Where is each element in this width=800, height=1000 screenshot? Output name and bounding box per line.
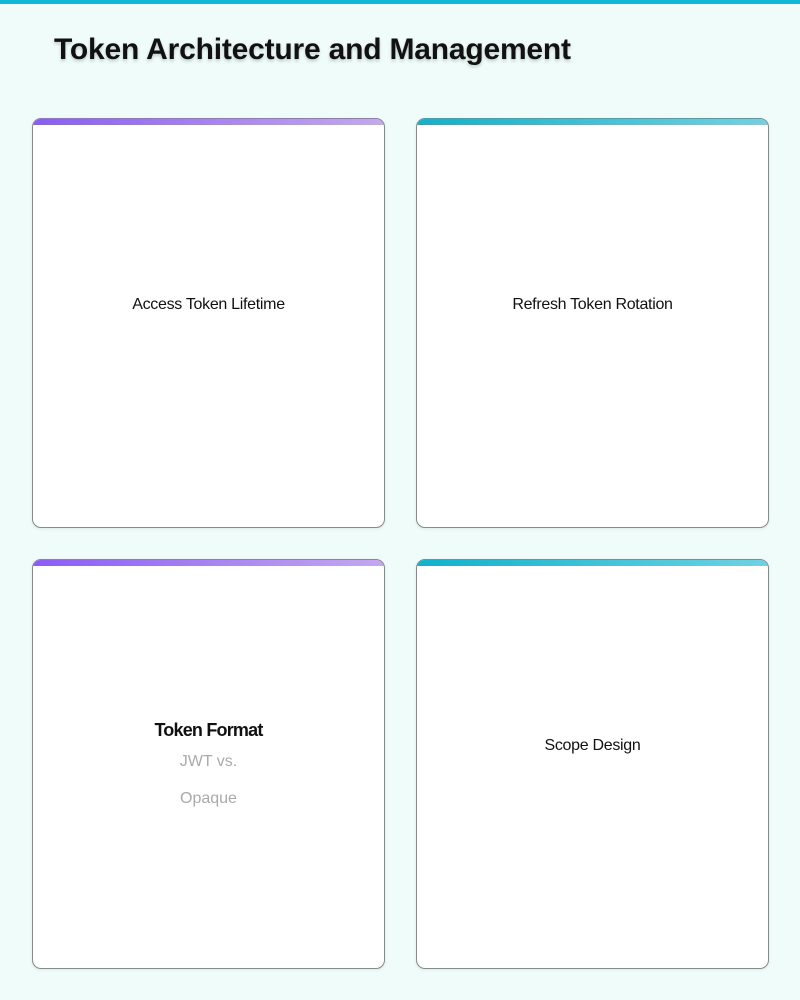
panel: access token lifetime (32, 118, 385, 528)
heading: token format: Token Format (154, 720, 263, 740)
text: scope design: Scope Design (544, 737, 641, 754)
text: refresh token rotation: Refresh Token Rotation (512, 296, 673, 313)
text: jwt vs opaque: Opaque (180, 790, 237, 807)
panel: token format (32, 559, 385, 969)
text: access token lifetime: Access Token Lifetime (132, 296, 285, 313)
text: jwt vs opaque: JWT vs. (180, 753, 237, 770)
title: Token Architecture and Management (54, 33, 571, 66)
panel: scope design (416, 559, 769, 969)
panel: refresh token rotation (416, 118, 769, 528)
text: jwt vs opaque (180, 753, 237, 807)
